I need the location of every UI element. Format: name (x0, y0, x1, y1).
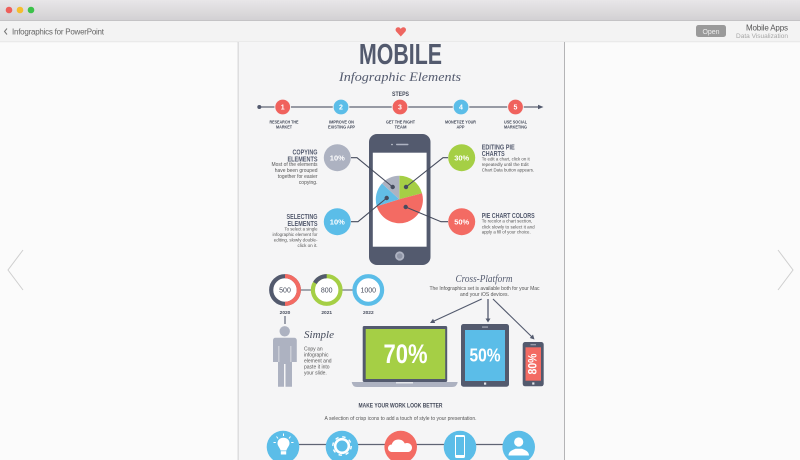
step 2 (328, 99, 355, 130)
step 3 (386, 99, 415, 130)
step 1: 1 (281, 104, 285, 112)
step 5: USE SOCIAL (504, 120, 527, 124)
ring: 1000: 1000 (361, 288, 376, 294)
text block: simple: element and (304, 358, 332, 364)
callout: selecting elements: infographic element for (272, 232, 318, 237)
ring: 500 (271, 276, 299, 316)
callout: copying elements: COPYING (292, 148, 318, 156)
callout: pie chart colors: To recolor a chart section, (482, 219, 532, 224)
callout: selecting elements: 10% (330, 218, 345, 226)
callout: pie chart colors: apply a fill of your choice. (482, 230, 531, 234)
open button: Open (702, 29, 720, 36)
step 5 (504, 99, 527, 130)
laptop: 70% (384, 339, 428, 369)
callout: selecting elements: SELECTING (286, 212, 318, 221)
arrow: to phone (493, 299, 534, 340)
toolbar: Infographics for PowerPoint (12, 28, 105, 36)
callout: pie chart colors: click slowly to select it and (482, 224, 535, 229)
callout: pie chart colors (404, 205, 535, 235)
icon: smartphone (444, 431, 476, 460)
step 4 (445, 99, 477, 130)
step 4: APP (456, 124, 464, 130)
tablet (461, 324, 509, 387)
window title bar (0, 0, 800, 21)
text block: cross-platform (430, 274, 540, 298)
step 4: MONETIZE YOUR (445, 120, 477, 124)
ring: 1000: 2022 (363, 310, 374, 316)
text block: simple: paste it into (304, 364, 330, 370)
step 4: 4 (459, 104, 463, 112)
callout: editing pie charts: repeatedly until the Edit (482, 162, 529, 167)
arrow: next (778, 250, 793, 290)
ring: 800: 2021 (321, 310, 332, 316)
phone with pie chart (369, 134, 430, 265)
icon: gear (326, 431, 358, 460)
small phone (523, 342, 544, 386)
ring charts timeline (271, 276, 382, 316)
toolbar (0, 21, 800, 42)
title: MOBILE (359, 39, 442, 71)
callout: editing pie charts: Chart Data button appears. (482, 168, 534, 172)
icon: user (502, 431, 535, 460)
ring: 500: 500 (279, 288, 291, 294)
icon: heart (396, 27, 406, 36)
step 3: 3 (398, 104, 402, 112)
callout: copying elements: together for easier (278, 174, 318, 180)
callout: editing pie charts: To edit a chart, click on it (482, 157, 530, 162)
small phone: 80% (526, 353, 540, 374)
callout: editing pie charts (404, 142, 534, 189)
toolbar: Data Visualization (736, 33, 788, 40)
text block: simple (304, 329, 334, 376)
callout: selecting elements: editing, slowly double- (274, 238, 318, 242)
pie chart (376, 176, 423, 223)
callout: pie chart colors: PIE CHART COLORS (482, 211, 535, 220)
subtitle: Infographic Elements (338, 69, 461, 84)
ring: 800: 800 (321, 288, 333, 294)
step 3: TEAM (394, 124, 407, 130)
callout: copying elements (272, 144, 395, 189)
callout: selecting elements: ELEMENTS (288, 219, 318, 228)
text block: icon intro: A selection of crisp icons to add a touch of style to your presentation. (324, 416, 476, 422)
steps timeline: STEPS (392, 91, 410, 98)
step 1: MARKET (276, 124, 292, 130)
icon: light bulb (267, 431, 299, 460)
step 2: 2 (339, 104, 343, 112)
text block: cross-platform: and your iOS devices. (460, 292, 509, 298)
ring: 800 (313, 276, 341, 316)
arrow: previous (8, 250, 23, 290)
step 2: IMPROVE ON (329, 120, 355, 124)
callout: editing pie charts: EDITING PIE (482, 142, 515, 152)
heading: make your work look better: MAKE YOUR WORK LOOK BETTER (358, 402, 443, 410)
ring: 500: 2020 (280, 310, 291, 316)
step 5: MARKETING (504, 124, 527, 130)
text block: simple: infographic (304, 352, 329, 358)
step 1: RESEARCH THE (270, 120, 298, 124)
callout: copying elements: have been grouped (275, 168, 318, 174)
callout: editing pie charts: CHARTS (482, 149, 505, 158)
callout: editing pie charts: 30% (454, 154, 470, 162)
callout: selecting elements: click on it. (298, 243, 318, 248)
text block: cross-platform: The Infographics set is available both for your Mac (430, 286, 540, 292)
icon: person (273, 326, 297, 387)
callout: copying elements: Most of the elements (272, 162, 318, 168)
callout: copying elements: copying. (299, 180, 318, 186)
ring: 1000 (354, 276, 382, 316)
page sheet (238, 42, 565, 460)
callout: copying elements: ELEMENTS (288, 154, 318, 163)
steps timeline (257, 91, 544, 130)
callout: selecting elements (272, 196, 389, 248)
toolbar: Mobile Apps (746, 24, 788, 32)
arrow: to tablet (486, 299, 490, 322)
callout: copying elements: 10% (330, 154, 345, 162)
step 5: 5 (514, 104, 518, 112)
callout: pie chart colors: 50% (454, 218, 470, 226)
open button (696, 25, 726, 37)
text block: simple: your slide. (304, 370, 327, 376)
tablet: 50% (470, 345, 500, 366)
step 2: EXISTING APP (328, 124, 355, 130)
text block: simple: Simple (304, 329, 334, 341)
text block: cross-platform: Cross-Platform (456, 274, 513, 285)
arrow: to laptop (430, 299, 482, 323)
callout: selecting elements: To select a single (284, 226, 318, 232)
icon: cloud (384, 431, 417, 460)
icon row (267, 431, 535, 460)
step 1 (270, 99, 298, 130)
text block: simple: Copy an (304, 346, 323, 352)
laptop (352, 326, 458, 387)
step 3: GET THE RIGHT (386, 120, 415, 124)
